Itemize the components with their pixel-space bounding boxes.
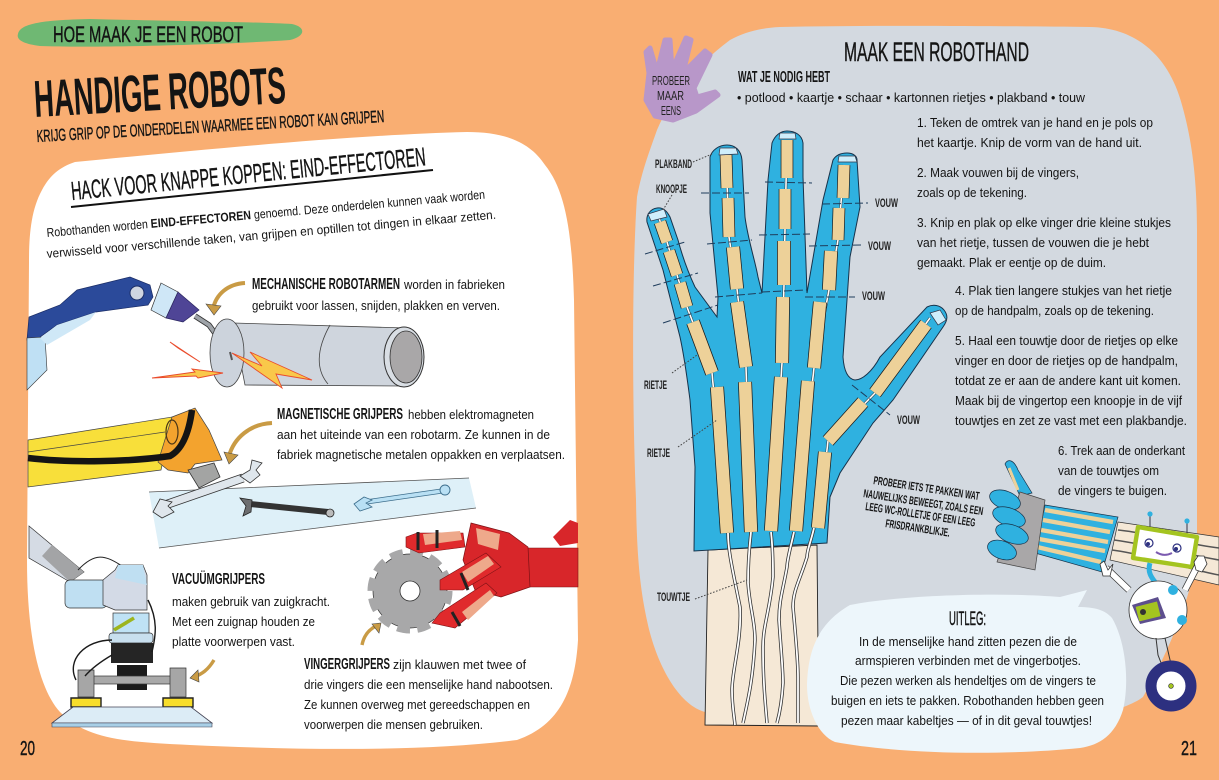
steps 1 to 3: 3. Knip en plak op elke vinger drie kleine stukjes xyxy=(917,216,1171,230)
heading: maak een robothand: MAAK EEN ROBOTHAND xyxy=(844,37,1029,67)
wrist xyxy=(705,545,820,726)
strings on wrist xyxy=(728,528,814,725)
arrow: to vacuum gripper xyxy=(190,660,214,682)
text: vingergrijpers: drie vingers die een menselijke hand nabootsen. xyxy=(304,678,553,692)
steps 4 and 5: touwtjes en zet ze vast met een plakbandje. xyxy=(955,414,1187,428)
callout: uitleg speech bubble: armspieren verbinden met de vingerbotjes. xyxy=(855,654,1081,668)
tip text: probeer iets te pakken: NAUWELIJKS BEWEEGT, ZOALS EEN xyxy=(863,488,984,518)
dotted leaders xyxy=(663,154,747,599)
callout: uitleg speech bubble: pezen maar kabeltjes — of in dit geval touwtjes! xyxy=(841,714,1092,728)
intro text: verwisseld voor verschillende taken, van grijpen en optillen tot dingen in elkaar zetten. xyxy=(46,208,497,261)
step 6 xyxy=(1058,444,1185,498)
text: magnetische grijpers: fabriek magnetische metalen oppakken en verplaatsen. xyxy=(277,448,565,462)
text: magnetische grijpers: MAGNETISCHE GRIJPERS xyxy=(277,406,403,423)
text: mechanische robotarmen: MECHANISCHE ROBOTARMEN xyxy=(252,276,400,293)
arrow: to welding arm xyxy=(206,283,245,315)
heading: hack voor knappe koppen: HACK VOOR KNAPPE KOPPEN: EIND-EFFECTOREN xyxy=(70,141,427,206)
tip text: probeer iets te pakken: FRISDRANKBLIKJE. xyxy=(885,518,951,540)
illustration: red robot hand xyxy=(406,520,578,628)
text: vacuümgrijpers xyxy=(172,569,330,649)
title: HANDIGE ROBOTS xyxy=(32,57,287,129)
step 6: de vingers te buigen. xyxy=(1058,484,1167,498)
diagram: paper hand xyxy=(645,131,947,726)
steps 4 and 5 xyxy=(955,284,1187,428)
steps 1 to 3 xyxy=(917,116,1171,270)
steps 1 to 3: van het rietje, tussen de vouwen die je hebt xyxy=(917,236,1150,250)
step 6: 6. Trek aan de onderkant xyxy=(1058,444,1185,458)
text: magnetische grijpers: aan het uiteinde van een robotarm. Ze kunnen in de xyxy=(277,428,550,442)
steps 4 and 5: totdat ze er aan de andere kant uit komen. xyxy=(955,374,1181,388)
text: vingergrijpers xyxy=(304,656,553,732)
tip text: probeer iets te pakken: LEEG WC-ROLLETJE OF EEN LEEG xyxy=(865,501,976,530)
text: vingergrijpers: Ze kunnen overweg met gereedschappen en xyxy=(304,698,530,712)
steps 4 and 5: vinger en door de rietjes op de handpalm, xyxy=(955,354,1178,368)
illustration: wrist with strings xyxy=(1110,522,1219,585)
label: knoopje: KNOOPJE xyxy=(656,182,687,196)
fold lines xyxy=(645,182,890,415)
illustration: small robot mascot xyxy=(1100,511,1207,706)
callout: uitleg speech bubble: UITLEG: xyxy=(949,609,986,630)
tip text: probeer iets te pakken xyxy=(863,475,984,540)
label: vouw 4: VOUW xyxy=(897,413,920,427)
materials list: • potlood • kaartje • schaar • kartonnen rietjes • plakband • touw xyxy=(737,91,1086,105)
materials list xyxy=(737,69,1086,105)
text: mechanische robotarmen: gebruikt voor lassen, snijden, plakken en verven. xyxy=(252,299,500,313)
callout: uitleg speech bubble: Die pezen werken als hendeltjes om de vingers te xyxy=(840,674,1096,688)
illustration: welding robot arm xyxy=(27,277,230,390)
illustration: metal tube with sparks xyxy=(152,319,424,388)
intro text: Robothanden worden EIND-EFFECTOREN genoemd. Deze onderdelen kunnen vaak worden xyxy=(46,188,486,240)
icon: purple hand badge: EENS xyxy=(661,103,681,118)
text: magnetische grijpers: hebben elektromagneten xyxy=(408,408,534,422)
steps 4 and 5: 4. Plak tien langere stukjes van het rietje xyxy=(955,284,1172,298)
tape at fingertips xyxy=(648,133,946,325)
materials list: WAT JE NODIG HEBT xyxy=(738,69,830,86)
strings through the straws xyxy=(658,140,930,533)
label: touwtje: TOUWTJE xyxy=(657,590,690,604)
text: vingergrijpers: VINGERGRIJPERS xyxy=(304,656,390,673)
steps 4 and 5: 5. Haal een touwtje door de rietjes op elke xyxy=(955,334,1178,348)
text: mechanische robotarmen: worden in fabrieken xyxy=(403,278,505,292)
icon: purple hand badge: MAAR xyxy=(657,88,684,103)
callout: uitleg speech bubble: In de menselijke hand zitten pezen die de xyxy=(859,635,1077,649)
illustration: vacuum gripper robot xyxy=(29,526,212,727)
heading: hack voor knappe koppen xyxy=(70,141,433,207)
illustration: magnetic gripper xyxy=(28,408,222,488)
text: mechanische robotarmen xyxy=(252,276,505,313)
text: vacuümgrijpers: Met een zuignap houden ze xyxy=(172,615,315,629)
page number 21: 21 xyxy=(1181,738,1197,760)
steps 4 and 5: op de handpalm, zoals op de tekening. xyxy=(955,304,1154,318)
arrow: to finger gripper xyxy=(362,623,381,645)
label: rietje 2: RIETJE xyxy=(647,446,670,460)
section tag: green pill: HOE MAAK JE EEN ROBOT xyxy=(53,22,243,47)
label: vouw 3: VOUW xyxy=(862,289,885,303)
panel: right page grey card xyxy=(633,26,1197,728)
steps 1 to 3: 1. Teken de omtrek van je hand en je pols op xyxy=(917,116,1153,130)
text: vacuümgrijpers: platte voorwerpen vast. xyxy=(172,635,295,649)
tip text: probeer iets te pakken: PROBEER IETS TE PAKKEN WAT xyxy=(873,475,980,503)
steps 4 and 5: Maak bij de vingertop een knoopje in de vijf xyxy=(955,394,1182,408)
text: vacuümgrijpers: VACUÜMGRIJPERS xyxy=(172,569,265,588)
steps 1 to 3: het kaartje. Knip de vorm van de hand uit. xyxy=(917,136,1142,150)
illustration: metal tools on panel xyxy=(149,460,476,548)
icon: purple hand badge xyxy=(646,38,718,120)
arrow: to magnetic gripper xyxy=(224,423,272,464)
steps 1 to 3: gemaakt. Plak er eentje op de duim. xyxy=(917,256,1106,270)
text: magnetische grijpers xyxy=(277,406,565,462)
page number 20: 20 xyxy=(20,738,35,760)
step 6: van de touwtjes om xyxy=(1058,464,1159,478)
callout: uitleg speech bubble: buigen en iets te pakken. Robothanden hebben geen xyxy=(831,694,1104,708)
steps 1 to 3: 2. Maak vouwen bij de vingers, xyxy=(917,166,1079,180)
label: rietje 1: RIETJE xyxy=(644,378,667,392)
illustration: paper hand gripping a roll xyxy=(985,461,1118,572)
panel: left page white card xyxy=(27,132,578,749)
text: vacuümgrijpers: maken gebruik van zuigkracht. xyxy=(172,595,330,609)
label: vouw 1: VOUW xyxy=(875,196,898,210)
blue hand cut-out xyxy=(647,131,947,551)
callout: uitleg speech bubble xyxy=(807,590,1126,753)
illustration: gear xyxy=(371,552,449,630)
label: vouw 2: VOUW xyxy=(868,239,891,253)
long straws xyxy=(693,241,926,533)
short straws xyxy=(660,140,844,307)
icon: purple hand badge: PROBEER xyxy=(652,73,690,88)
steps 1 to 3: zoals op de tekening. xyxy=(917,186,1027,200)
text: vingergrijpers: zijn klauwen met twee of xyxy=(393,658,527,672)
label: plakband: PLAKBAND xyxy=(655,157,692,171)
text: vingergrijpers: voorwerpen die mensen gebruiken. xyxy=(304,718,483,732)
subtitle: KRIJG GRIP OP DE ONDERDELEN WAARMEE EEN ROBOT KAN GRIJPEN xyxy=(36,107,385,146)
